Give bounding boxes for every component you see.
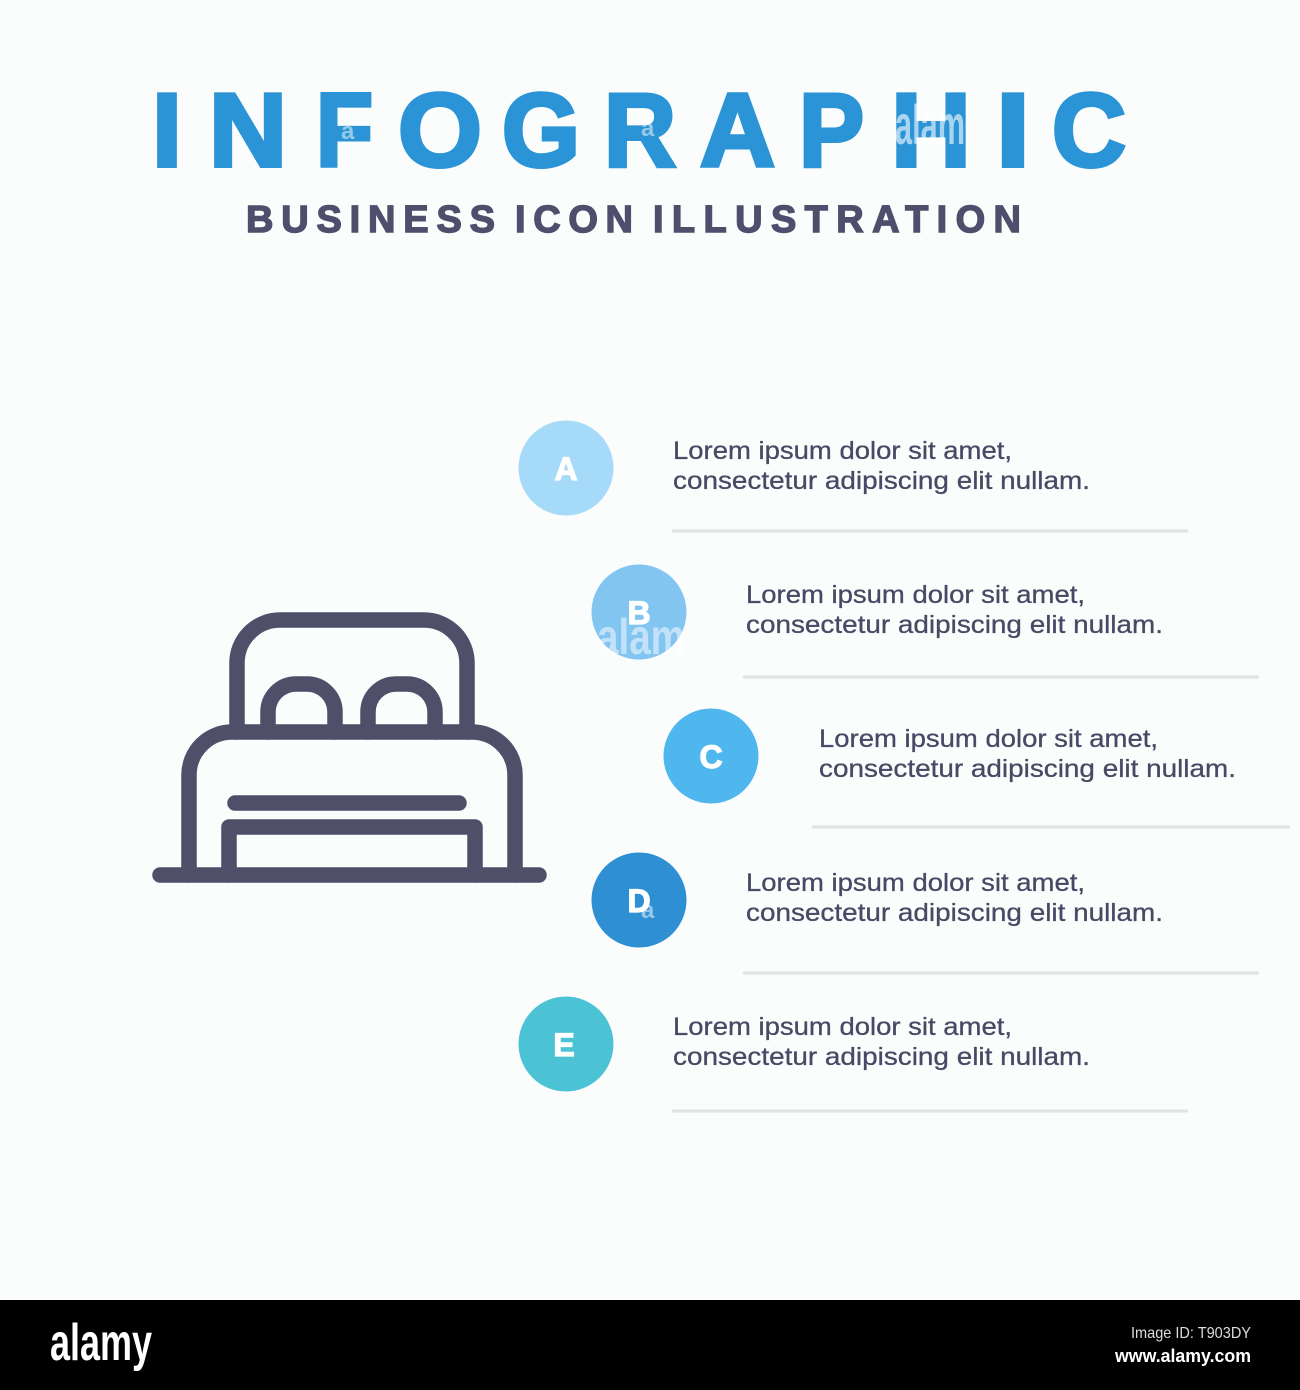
item B: B (627, 595, 651, 631)
watermark: title: alam (895, 93, 965, 156)
item D: Lorem ipsum dolor sit amet, (746, 869, 1085, 897)
title: I (152, 73, 182, 189)
subtitle: BUSINESS (246, 199, 495, 241)
title: R (604, 73, 676, 189)
item C: C (699, 739, 723, 775)
item B: consectetur adipiscing elit nullam. (746, 611, 1163, 639)
item C (664, 708, 1290, 828)
watermark: circle B: alam (597, 609, 685, 665)
subtitle: ICON (515, 199, 633, 241)
item E (518, 996, 1188, 1112)
footer url: www.alamy.com (1114, 1346, 1251, 1366)
title: C (1052, 73, 1126, 189)
item D: consectetur adipiscing elit nullam. (746, 899, 1163, 927)
title: N (209, 73, 287, 189)
item B: Lorem ipsum dolor sit amet, (746, 581, 1085, 609)
title: G (502, 73, 580, 189)
item A (518, 420, 1188, 532)
title: I (996, 73, 1030, 189)
item A: Lorem ipsum dolor sit amet, (673, 437, 1012, 465)
watermark: circle D: a (641, 897, 655, 924)
title (152, 73, 1126, 189)
item A: A (554, 451, 578, 487)
item E: consectetur adipiscing elit nullam. (673, 1043, 1090, 1071)
footer image id: Image ID: T903DY (1131, 1325, 1251, 1342)
item E: Lorem ipsum dolor sit amet, (673, 1013, 1012, 1041)
watermark: title letter R: a (641, 115, 655, 142)
title: P (799, 73, 864, 189)
icon: bed (160, 620, 539, 875)
item B (592, 564, 1259, 678)
footer logo: alamy (50, 1314, 152, 1372)
item C: consectetur adipiscing elit nullam. (819, 755, 1236, 783)
subtitle (246, 199, 1021, 241)
item C: Lorem ipsum dolor sit amet, (819, 725, 1158, 753)
title: H (891, 73, 971, 189)
subtitle: ILLUSTRATION (653, 199, 1021, 241)
title: A (700, 73, 775, 189)
watermark: title letter F: a (341, 118, 355, 145)
item D (592, 852, 1259, 974)
item E: E (553, 1027, 575, 1063)
title: O (398, 73, 482, 189)
footer bar (0, 1300, 1300, 1390)
item A: consectetur adipiscing elit nullam. (673, 467, 1090, 495)
title: F (316, 73, 373, 189)
item D: D (627, 883, 651, 919)
